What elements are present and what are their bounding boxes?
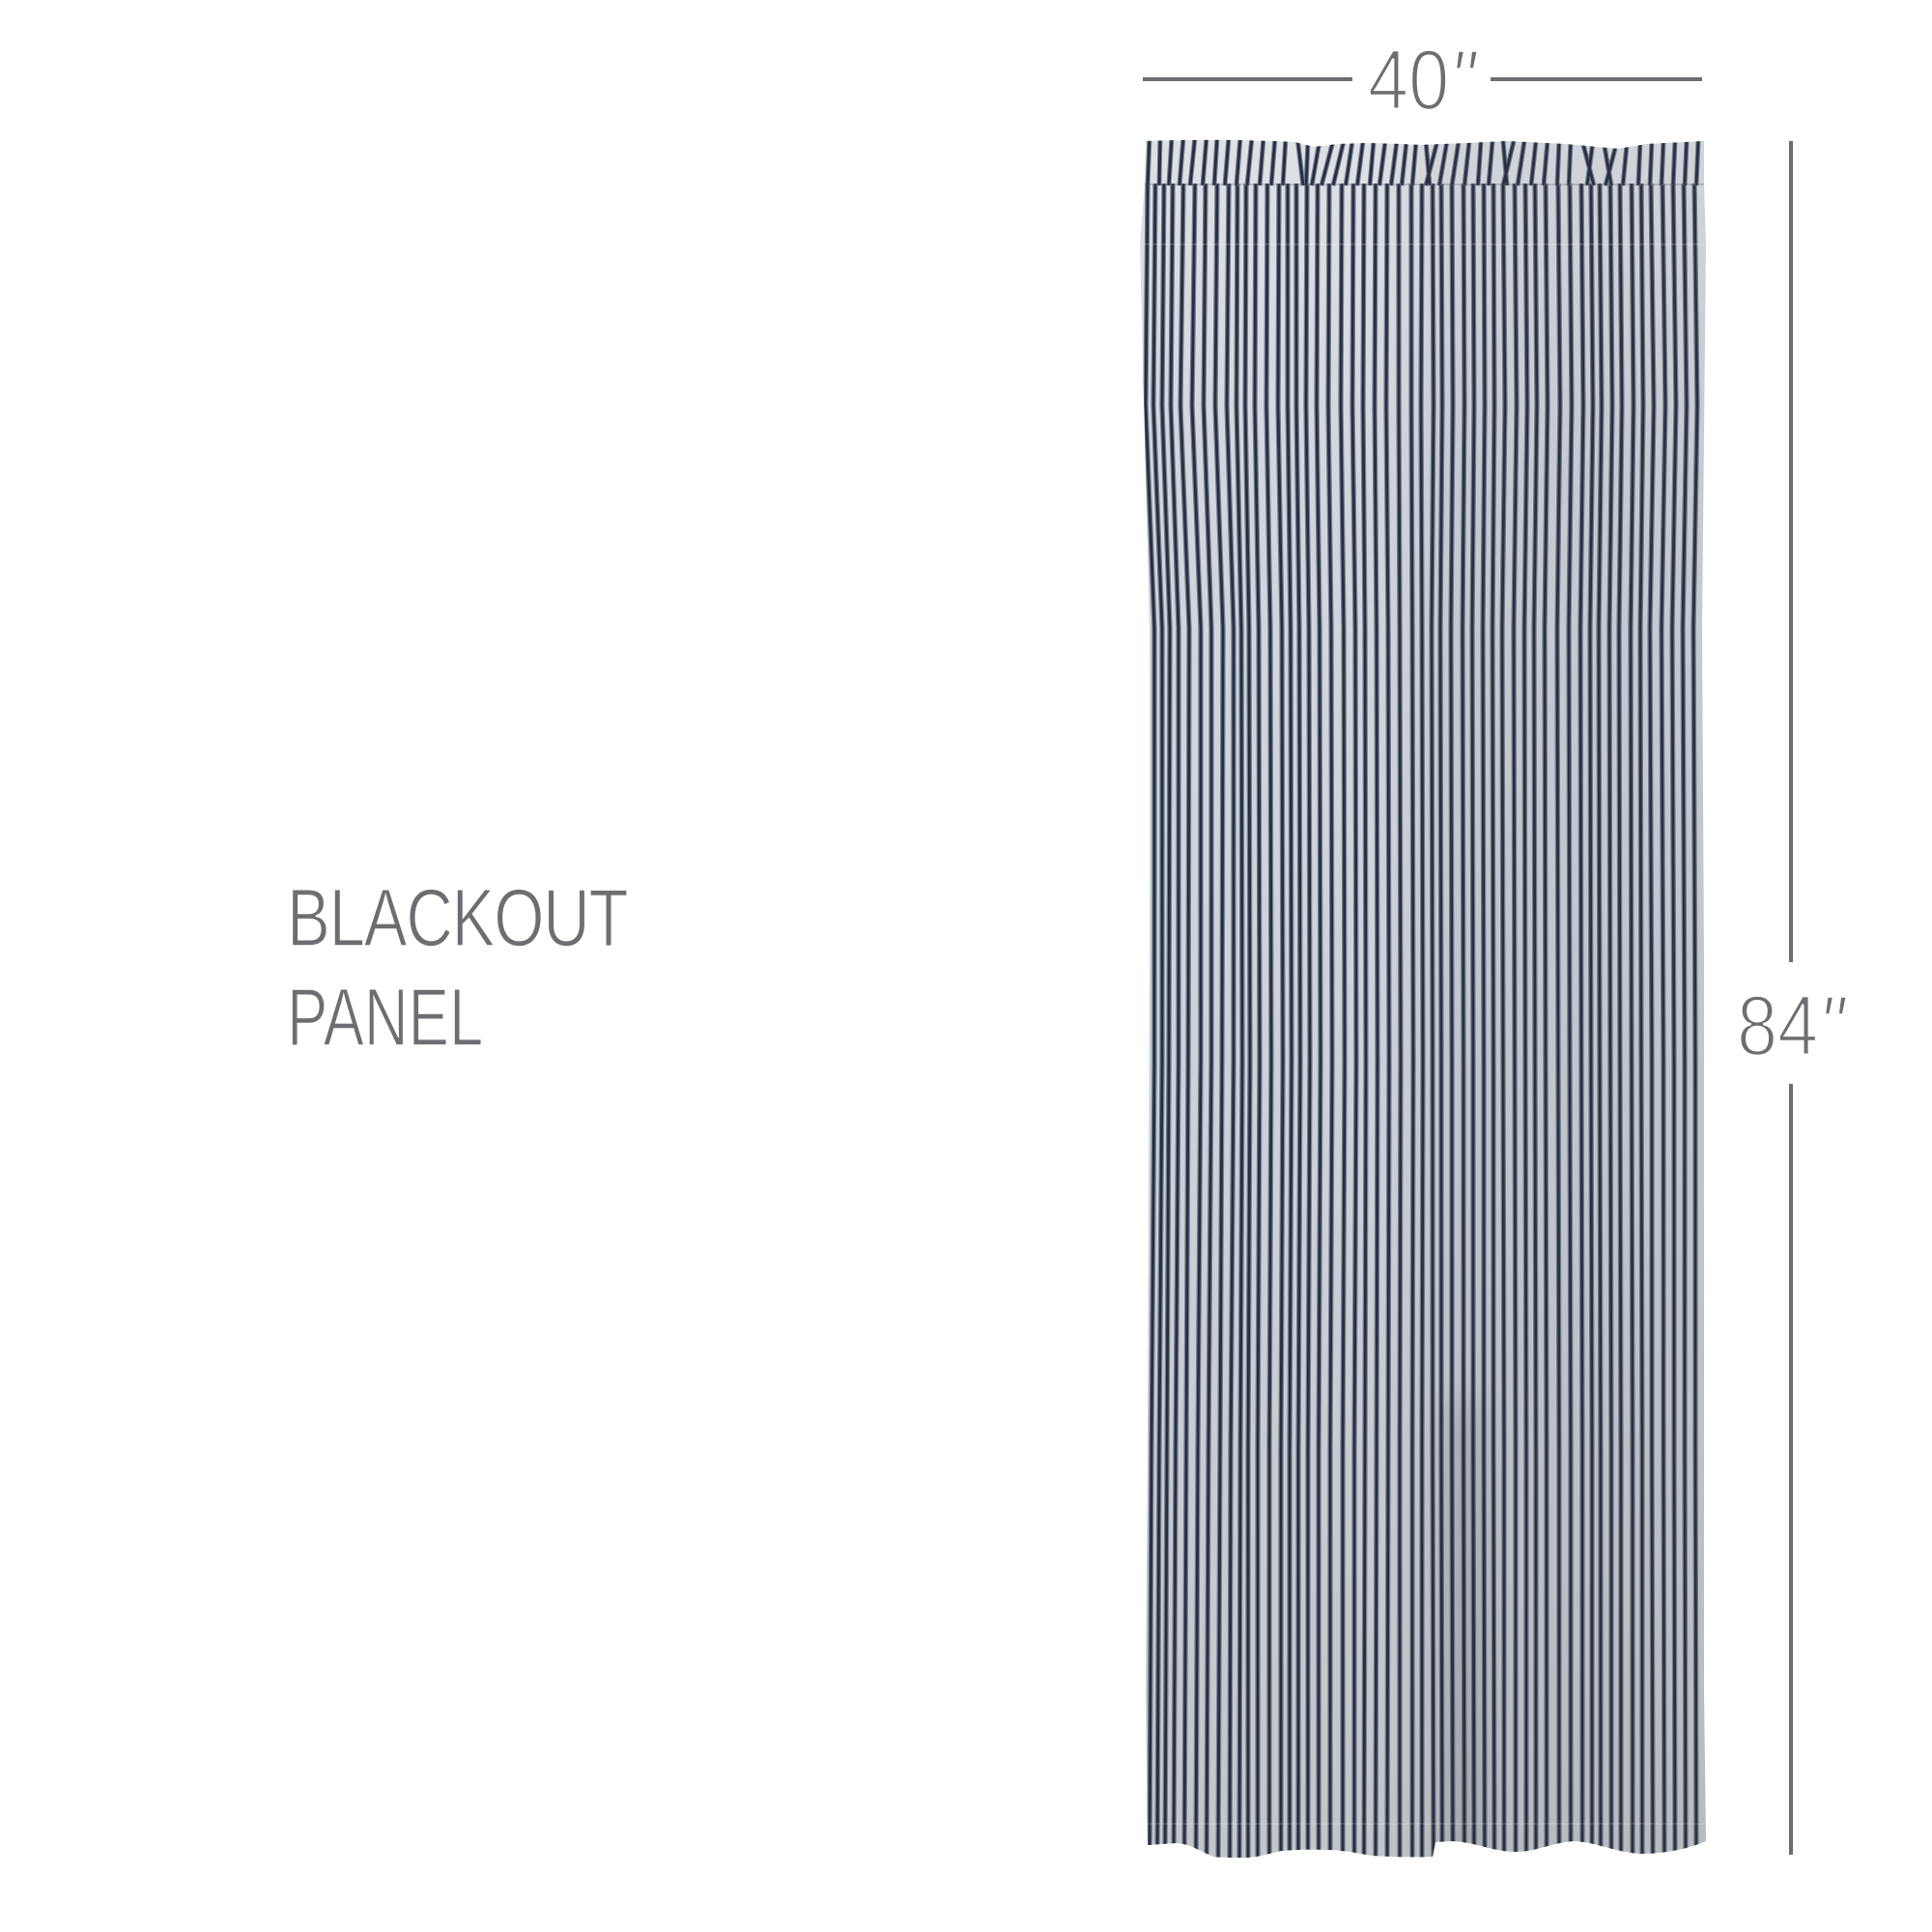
header ruffle stripes — [1148, 137, 1698, 185]
hem stitching — [1140, 1823, 1710, 1825]
fabric base — [1130, 135, 1719, 1864]
curtain panel with ticking stripes — [1130, 135, 1719, 1864]
panel label: BLACKOUT PANEL — [287, 873, 629, 1063]
header stitching — [1136, 243, 1710, 245]
header ruffle dark — [1148, 137, 1698, 185]
dimension value: 40 inches: 40" — [1368, 34, 1479, 128]
label line: PANEL: PANEL — [287, 972, 483, 1063]
height dimension: 84 inches — [1737, 141, 1848, 1855]
stripes: dark core — [1146, 184, 1697, 1864]
rod pocket stitching — [1138, 184, 1710, 185]
stripes: soft edge — [1146, 184, 1697, 1864]
width dimension: 40 inches — [1143, 34, 1702, 128]
dimension line bottom — [1789, 1084, 1793, 1855]
dimension line left — [1143, 77, 1352, 81]
shading: bottom fold — [1444, 1401, 1483, 1864]
shading: right side folds — [1423, 141, 1706, 1854]
dimension line right — [1491, 77, 1702, 81]
dimension value: 84 inches: 84" — [1737, 980, 1848, 1073]
dimension line top — [1789, 141, 1793, 962]
label line: BLACKOUT: BLACKOUT — [287, 873, 629, 964]
